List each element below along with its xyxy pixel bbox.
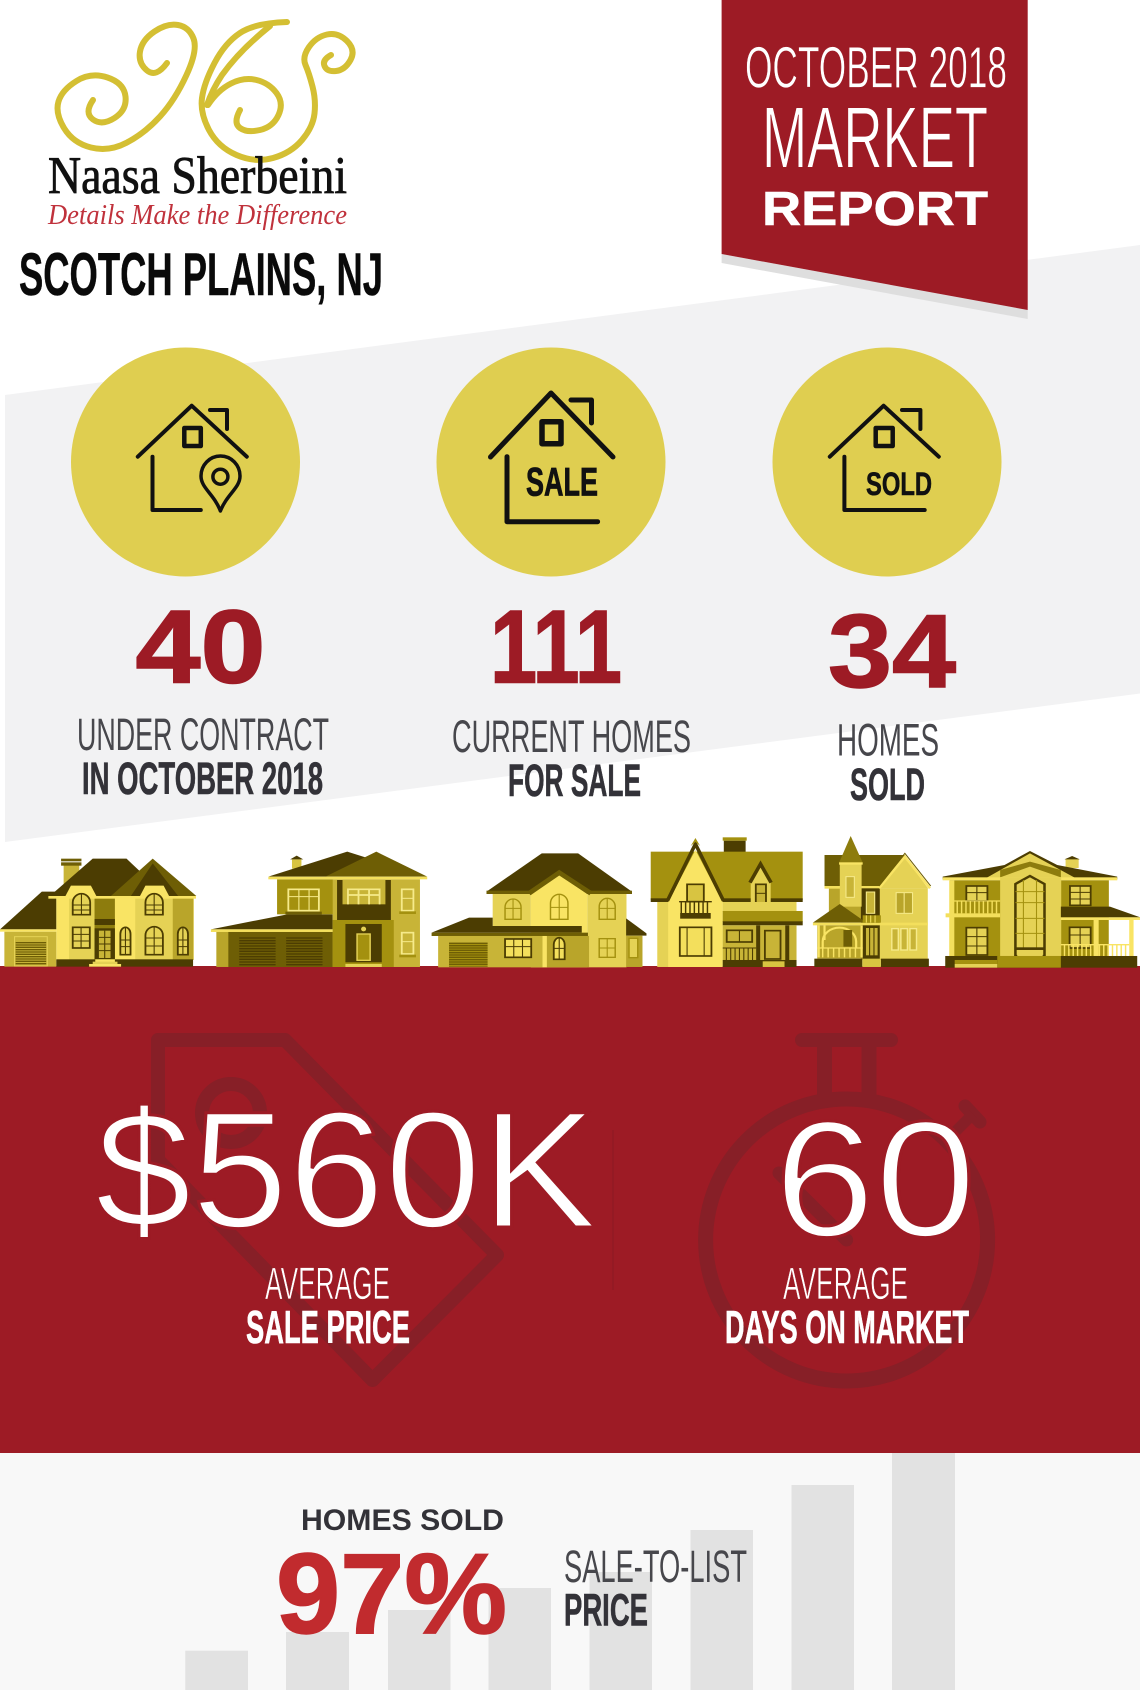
panel: sale-to-list — [0, 1453, 1140, 1690]
panel: average sale price: SALE PRICE — [246, 1301, 410, 1353]
stat: current homes for sale: CURRENT HOMES — [452, 711, 691, 762]
icon: house with sold sign: SOLD — [866, 466, 932, 502]
stat: under contract — [71, 348, 329, 804]
icon: house with sale sign: SALE — [526, 460, 598, 504]
house 4 — [651, 837, 803, 967]
panel: sale-to-list: PRICE — [564, 1585, 648, 1636]
stat: current homes for sale: FOR SALE — [508, 755, 641, 806]
stat: current homes for sale: 111 — [490, 590, 622, 706]
houses row — [0, 836, 1140, 968]
title banner — [722, 0, 1028, 319]
icon: house with sold sign — [772, 348, 1002, 576]
panel: average days on market — [706, 1040, 988, 1381]
panel: average days on market: DAYS ON MARKET — [725, 1301, 969, 1353]
stat: homes sold: SOLD — [850, 759, 925, 810]
logo: Naasa Sherbeini — [47, 22, 353, 231]
stat: homes sold: 34 — [828, 594, 956, 710]
stat: under contract: IN OCTOBER 2018 — [82, 753, 323, 804]
panel: average sale price — [95, 1040, 597, 1380]
panel: average sale price: $560K — [95, 1078, 597, 1263]
panel: average sale price: AVERAGE — [265, 1258, 390, 1309]
house 6 — [943, 851, 1140, 968]
house 5 — [813, 836, 931, 967]
icon: house with sale sign — [436, 348, 666, 576]
stat: current homes for sale — [436, 348, 691, 806]
house 2 — [211, 852, 427, 967]
stat: under contract: UNDER CONTRACT — [77, 709, 329, 760]
logo: Naasa Sherbeini: Details Make the Difference — [47, 199, 347, 231]
title banner: MARKET — [762, 90, 988, 187]
location heading: SCOTCH PLAINS, NJ — [19, 241, 383, 308]
house 1 — [0, 859, 196, 967]
stat: homes sold — [772, 348, 1002, 810]
logo: Naasa Sherbeini: Naasa Sherbeini — [48, 147, 347, 205]
panel: average days on market: 60 — [774, 1087, 976, 1271]
icon: house with map pin — [71, 348, 300, 576]
icon: stopwatch watermark — [706, 1040, 988, 1381]
stat: under contract: 40 — [136, 590, 266, 706]
panel: sale-to-list: SALE-TO-LIST — [564, 1541, 747, 1592]
stat: homes sold: HOMES — [837, 715, 939, 766]
red band — [0, 966, 1140, 1453]
house 3 — [432, 853, 646, 967]
panel: sale-to-list: 97% — [276, 1531, 507, 1658]
panel: sale-to-list: HOMES SOLD — [301, 1504, 504, 1537]
icon: price tag watermark — [158, 1040, 497, 1380]
bar chart watermark — [185, 1453, 955, 1690]
divider — [612, 1130, 614, 1290]
panel: average days on market: AVERAGE — [783, 1258, 908, 1309]
title banner: REPORT — [762, 183, 988, 236]
